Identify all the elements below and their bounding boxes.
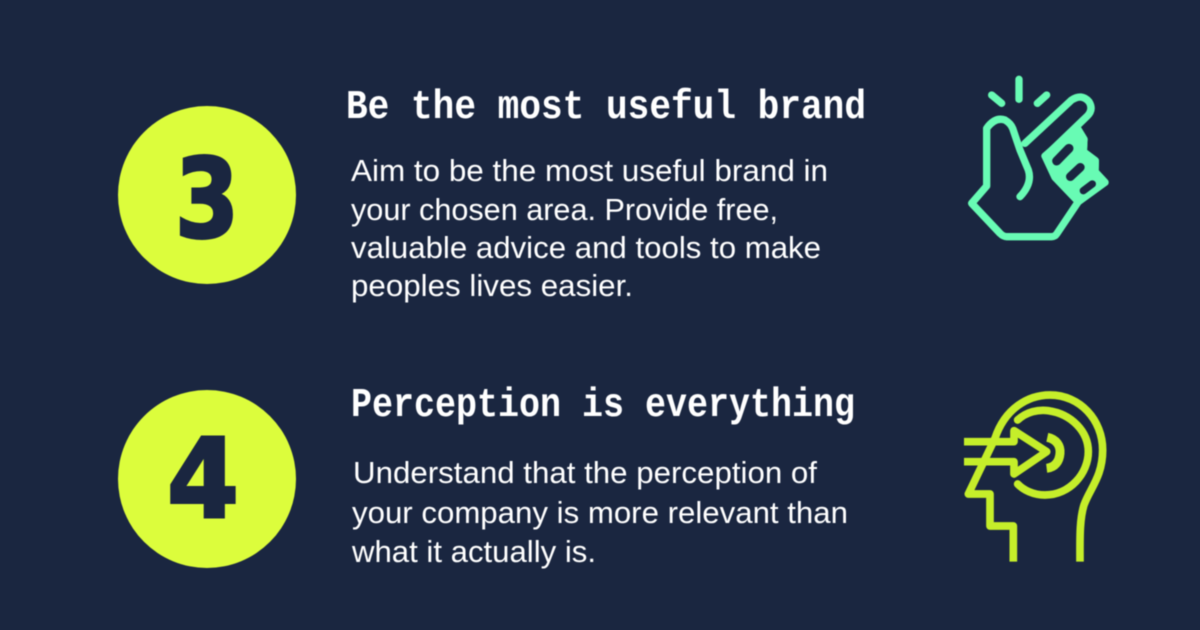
text block: step 4 description: Understand that the perception of <box>353 455 817 490</box>
text block: step 4 description: your company is more relevant than <box>352 495 848 530</box>
text block: step 3 description: peoples lives easier. <box>351 268 633 303</box>
text block: step 4 description: what it actually is. <box>351 534 596 569</box>
text block: step 3 description: Aim to be the most useful brand in <box>351 153 828 188</box>
icon: finger snap <box>972 79 1105 237</box>
panel: step 4 <box>118 383 1103 569</box>
text block: step 3 description: valuable advice and tools to make <box>351 230 821 265</box>
panel: step 3 <box>118 79 1105 303</box>
number badge 3 <box>118 106 296 284</box>
text block: step 3 description: your chosen area. Provide free, <box>351 192 778 227</box>
number badge 4 <box>118 390 296 568</box>
text block: step 3 description <box>351 153 828 303</box>
heading: step 3: Be the most useful brand <box>346 85 866 131</box>
text block: step 4 description <box>351 455 848 569</box>
heading: step 4: Perception is everything <box>351 383 855 429</box>
number badge 4: 4 <box>167 415 239 543</box>
number badge 3: 3 <box>175 135 239 263</box>
icon: head with arrow target <box>964 395 1103 562</box>
